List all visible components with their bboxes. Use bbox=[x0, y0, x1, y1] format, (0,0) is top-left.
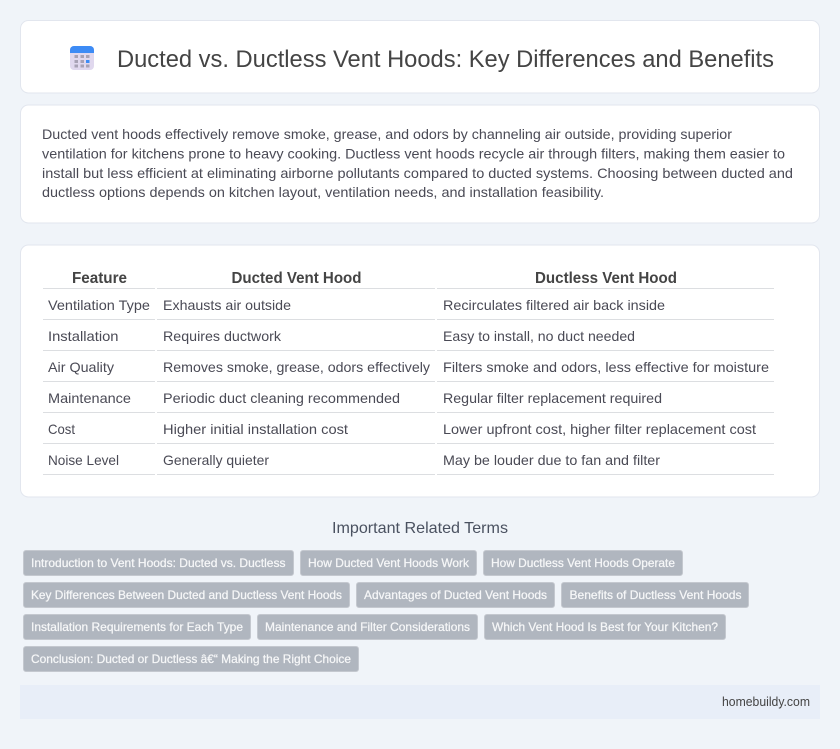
tag bbox=[24, 614, 250, 640]
tag: How Ductless Vent Hoods Operate bbox=[491, 556, 675, 570]
tag bbox=[484, 550, 682, 576]
tag bbox=[300, 550, 476, 576]
icon: calendar grid bbox=[70, 46, 94, 70]
row: noise level: Noise Level bbox=[48, 452, 119, 468]
panel: introduction bbox=[20, 105, 820, 223]
row: installation: Easy to install, no duct needed bbox=[443, 328, 635, 344]
tag bbox=[356, 582, 554, 608]
intro paragraph bbox=[42, 126, 793, 200]
row: installation: Installation bbox=[48, 328, 118, 344]
tag: Which Vent Hood Is Best for Your Kitchen? bbox=[492, 620, 718, 634]
tag bbox=[24, 550, 294, 576]
title: Ducted vs. Ductless Vent Hoods: Key Differences and Benefits bbox=[117, 46, 774, 73]
tag: Conclusion: Ducted or Ductless â€“ Making the Right Choice bbox=[31, 652, 351, 666]
tag bbox=[258, 614, 478, 640]
row: ventilation type: Exhausts air outside bbox=[163, 297, 291, 313]
row: installation: Requires ductwork bbox=[163, 328, 282, 344]
row: maintenance bbox=[48, 390, 662, 406]
tag: How Ducted Vent Hoods Work bbox=[308, 556, 470, 570]
row: noise level bbox=[48, 452, 660, 468]
tag: Benefits of Ductless Vent Hoods bbox=[570, 588, 742, 602]
row: installation bbox=[48, 328, 635, 344]
footer bbox=[20, 685, 820, 719]
row: maintenance: Periodic duct cleaning recommended bbox=[163, 390, 400, 406]
tag bbox=[24, 646, 358, 672]
tag: Advantages of Ducted Vent Hoods bbox=[364, 588, 547, 602]
row: maintenance: Maintenance bbox=[48, 390, 131, 406]
table header: Ductless Vent Hood bbox=[535, 270, 677, 287]
heading: important related terms: Important Related Terms bbox=[332, 520, 508, 537]
row: cost: Cost bbox=[48, 421, 75, 437]
tag: Key Differences Between Ducted and Ductless Vent Hoods bbox=[31, 588, 342, 602]
row: ventilation type: Ventilation Type bbox=[48, 297, 150, 313]
table grid lines bbox=[43, 288, 774, 474]
row: cost: Lower upfront cost, higher filter replacement cost bbox=[443, 421, 756, 437]
row: noise level: May be louder due to fan and filter bbox=[443, 452, 660, 468]
intro paragraph: ventilation for kitchens prone to heavy cooking. Ductless vent hoods recycle air through filters, making them easier to bbox=[42, 146, 785, 162]
tag bbox=[24, 582, 350, 608]
row: cost: Higher initial installation cost bbox=[163, 421, 348, 437]
row: ventilation type bbox=[48, 297, 665, 313]
tag bbox=[562, 582, 748, 608]
row: ventilation type: Recirculates filtered air back inside bbox=[443, 297, 665, 313]
row: maintenance: Regular filter replacement required bbox=[443, 390, 662, 406]
tag: Maintenance and Filter Considerations bbox=[265, 620, 470, 634]
related terms tags bbox=[24, 550, 748, 672]
row: noise level: Generally quieter bbox=[163, 452, 269, 468]
intro paragraph: install but less efficient at eliminating airborne pollutants compared to ducted systems. Choosing between ducted and bbox=[42, 165, 793, 181]
intro paragraph: ductless options depends on kitchen layout, ventilation needs, and installation feasibility. bbox=[42, 184, 604, 200]
table header bbox=[72, 270, 677, 287]
table header: Ducted Vent Hood bbox=[232, 270, 362, 287]
tag: Introduction to Vent Hoods: Ducted vs. Ductless bbox=[31, 556, 286, 570]
panel: title header bbox=[20, 20, 820, 93]
panel: comparison table bbox=[20, 245, 820, 497]
footer: homebuildy.com bbox=[722, 695, 810, 709]
row: air quality: Air Quality bbox=[48, 359, 114, 375]
table header: Feature bbox=[72, 270, 127, 287]
row: air quality bbox=[48, 359, 769, 375]
tag: Installation Requirements for Each Type bbox=[31, 620, 243, 634]
row: air quality: Filters smoke and odors, less effective for moisture bbox=[443, 359, 769, 375]
intro paragraph: Ducted vent hoods effectively remove smoke, grease, and odors by channeling air outside, providing superior bbox=[42, 126, 732, 142]
tag bbox=[484, 614, 726, 640]
row: cost bbox=[48, 421, 756, 437]
row: air quality: Removes smoke, grease, odors effectively bbox=[163, 359, 430, 375]
